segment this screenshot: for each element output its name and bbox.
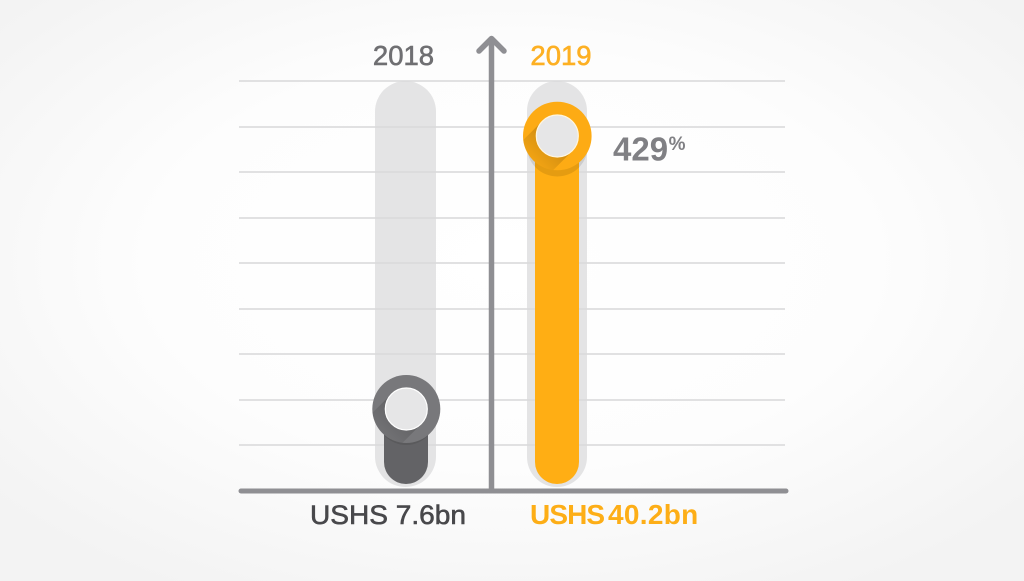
- growth percentage: %: [669, 134, 686, 155]
- value label 2019: 40.2bn: [608, 499, 699, 530]
- value label 2019: USHS: [530, 499, 611, 530]
- marker 2018: [372, 375, 440, 443]
- bar track 2019: [527, 81, 587, 487]
- bar track 2018: [375, 81, 436, 487]
- bar: 2019: [523, 82, 592, 487]
- marker 2019: [523, 102, 592, 170]
- marker shadow on bar 2018: [383, 434, 430, 445]
- value label 2018: USHS 7.6bn: [310, 500, 466, 530]
- marker shadow on track 2019: [528, 154, 587, 176]
- year label 2018: 2018: [373, 40, 434, 71]
- axes with arrow: [241, 38, 786, 491]
- bar fill 2019: [535, 140, 579, 484]
- bar fill 2018: [384, 400, 428, 484]
- growth percentage: 429: [613, 130, 668, 168]
- year label 2019: 2019: [530, 40, 592, 71]
- bar: 2018: [372, 82, 440, 487]
